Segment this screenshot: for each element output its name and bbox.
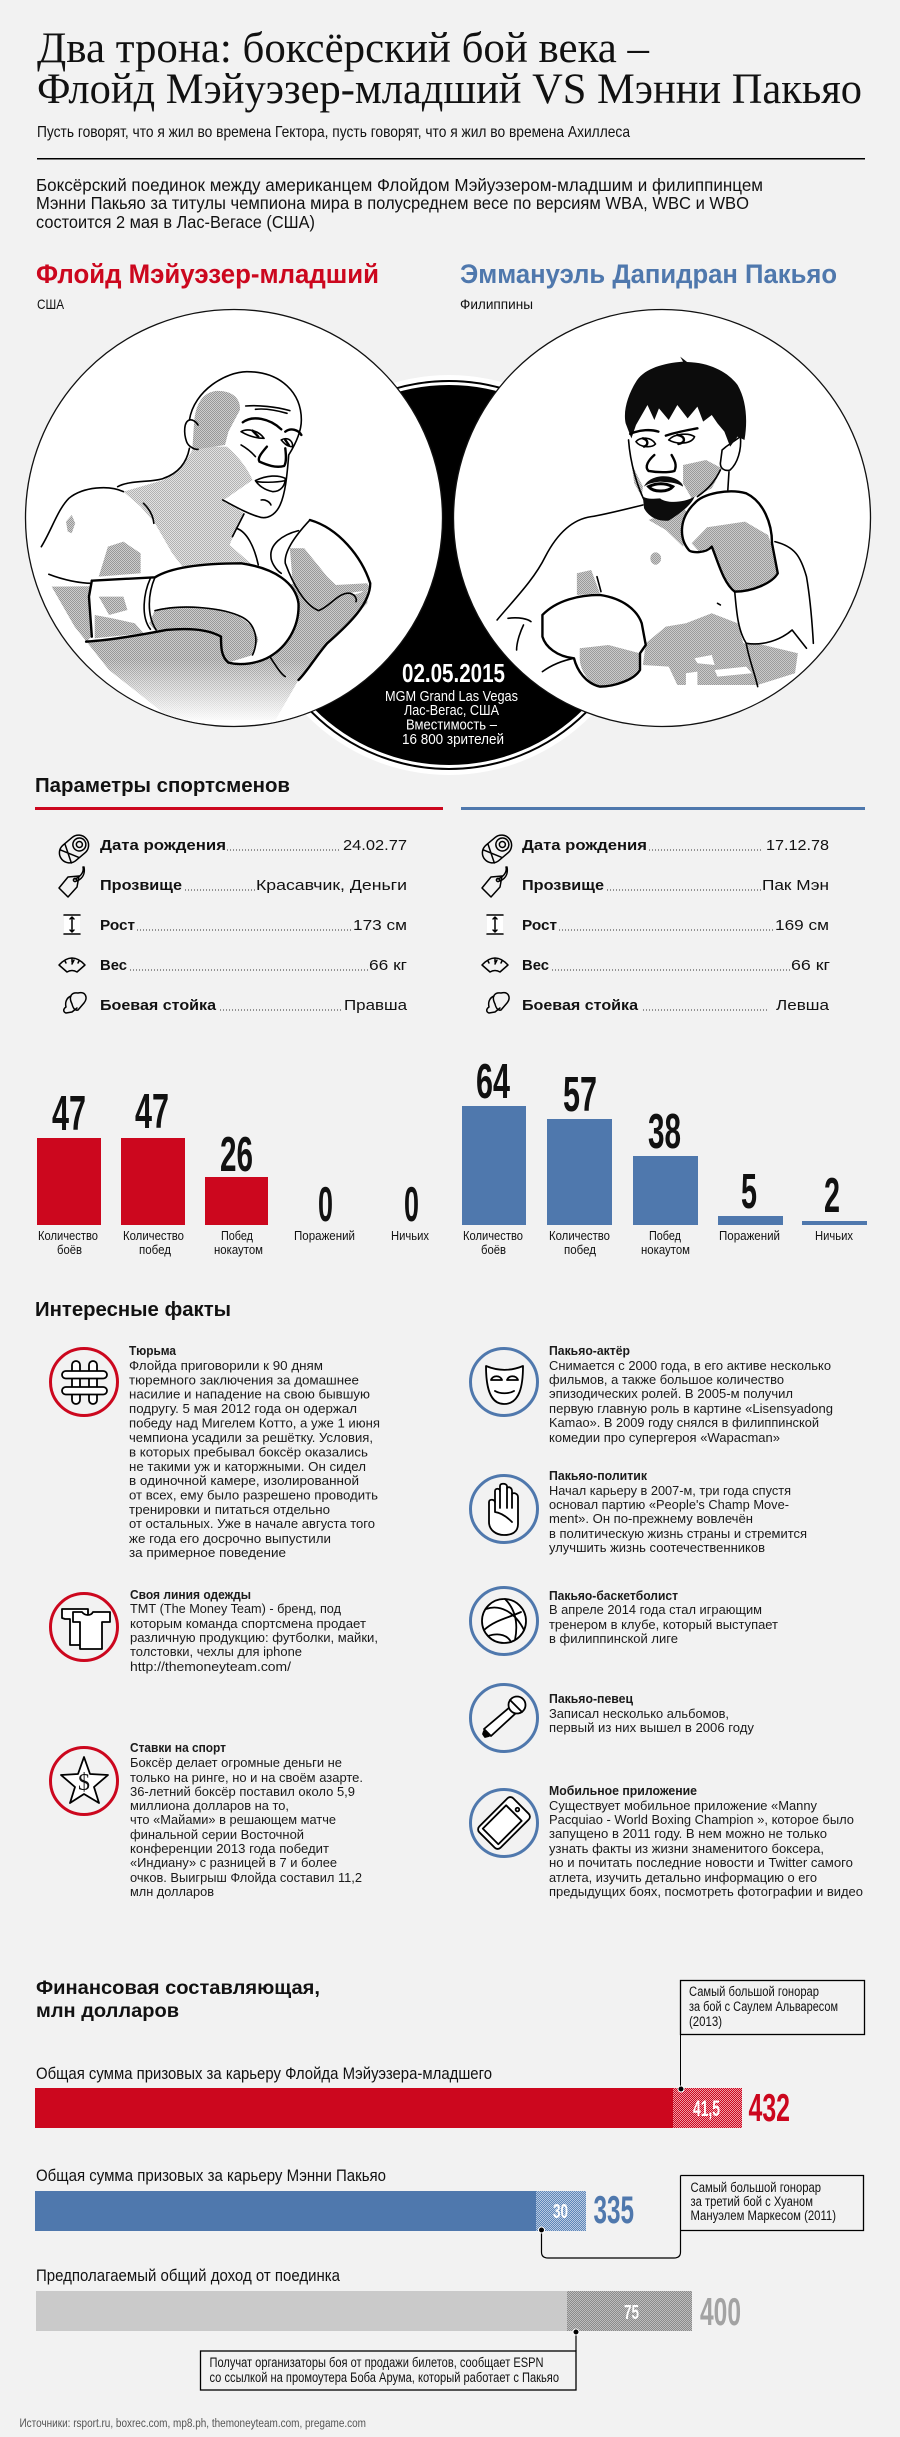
row: stance: Боевая стойка: [100, 997, 217, 1014]
icon: scales: [482, 958, 508, 972]
fact: prison: же года его досрочно выпустили: [129, 1531, 331, 1546]
row: birth date: Дата рождения: [522, 837, 647, 854]
finance bar: Pacquiao: 30: [553, 2201, 568, 2223]
row: stance: Боевая стойка: [522, 997, 639, 1014]
moustache and goatee: [643, 476, 695, 521]
intro text: [36, 175, 763, 232]
icon: scales: [59, 958, 85, 972]
heading: financial part: млн долларов: [36, 2001, 179, 2022]
bar chart: Mayweather record: 47: [135, 1085, 169, 1139]
bar chart: Pacquiao record: Ничьих: [815, 1228, 853, 1243]
icon: microphone: [470, 1684, 538, 1752]
finance bar: fight revenue: 75: [624, 2302, 639, 2324]
fact: clothing line: которым команда спортсмена продает: [130, 1616, 366, 1631]
halftone shading: body: [577, 460, 798, 685]
halftone shading: chest and neck: [123, 447, 253, 568]
bar chart: Pacquiao record: Количество: [549, 1228, 610, 1243]
bar chart: Mayweather record: Количество: [123, 1228, 184, 1243]
bar chart: Mayweather record: 0: [404, 1178, 419, 1232]
icon: tag: [59, 867, 84, 897]
fact: actor: Снимается с 2000 года, в его активе несколько: [549, 1358, 831, 1373]
ink outline: [41, 372, 301, 583]
fighter name: Mayweather: [36, 259, 379, 312]
bar chart: Pacquiao record: Поражений: [719, 1228, 780, 1243]
fact: sports betting: «Индиану» с разницей в 7 и более: [130, 1855, 337, 1870]
fact: sports betting: [50, 1740, 363, 1899]
callout: ticket sales: со ссылкой на промоутера Боба Арума, который работает с Пакьяо: [210, 2370, 559, 2385]
icon: raised hand: [470, 1476, 538, 1542]
upper glove: [683, 514, 692, 541]
callout: biggest Mayweather fee: Самый большой гонорар: [689, 1984, 819, 1999]
heading: financial part: [36, 1978, 320, 2022]
bar chart: Mayweather record: боёв: [57, 1242, 82, 1257]
fact: sports betting: миллиона долларов на то,: [130, 1798, 289, 1813]
icon: dollar star: $: [78, 1770, 90, 1796]
fact: prison: [50, 1343, 380, 1560]
row: stance: Левша: [776, 997, 830, 1014]
subtitle: Пусть говорят, что я жил во времена Гектора, пусть говорят, что я жил во времена Ахиллеса: [37, 124, 630, 141]
row: stance: [100, 997, 408, 1014]
finance bar: Mayweather: 432: [748, 2087, 790, 2130]
bar chart: Mayweather record: побед: [139, 1242, 171, 1257]
ink outline: [497, 437, 813, 687]
fact: sports betting: млн долларов: [130, 1884, 214, 1899]
far glove: [323, 583, 368, 610]
callout: biggest Pacquiao fee: Мануэлем Маркесом (2011): [690, 2208, 836, 2223]
fact: actor: первую главную роль в картине «Lisensyadong: [549, 1401, 833, 1416]
bar chart: Mayweather record: нокаутом: [214, 1242, 263, 1257]
fact: sports betting: Боксёр делает огромные деньги не: [130, 1755, 342, 1770]
fighter name: Pacquiao: [460, 259, 837, 312]
fact: politician: основал партию «People's Champ Move-: [549, 1497, 789, 1512]
fact: sports betting: 36-летний боксёр поставил около 5,9: [130, 1784, 355, 1799]
intro text: состоится 2 мая в Лас-Вегасе (США): [36, 212, 315, 232]
fact: clothing line: толстовки, чехлы для iphone: [130, 1644, 302, 1659]
fact: politician: в политическую жизнь страны и стремится: [549, 1526, 807, 1541]
event details: 02.05.2015: [402, 658, 505, 688]
row: weight: [100, 957, 408, 974]
row: stance: Правша: [344, 997, 408, 1014]
fact: sports betting: конференции 2013 года победит: [130, 1841, 329, 1856]
icon: smartphone: [470, 1790, 538, 1856]
bar chart: Pacquiao record: побед: [564, 1242, 596, 1257]
finance bar: fight revenue: Предполагаемый общий доход от поединка: [36, 2267, 341, 2285]
bar chart: Mayweather record: 0: [318, 1178, 333, 1232]
sources: Источники: rsport.ru, boxrec.com, mp8.ph, themoneyteam.com, pregame.com: [20, 2418, 366, 2430]
bar chart: Pacquiao record: 2: [824, 1169, 840, 1223]
rule: blue: [461, 807, 865, 810]
fact: basketball: тренером в клубе, который выступает: [549, 1617, 778, 1632]
event details: MGM Grand Las Vegas: [385, 689, 518, 705]
fighter name: Pacquiao: Эммануэль Дапидран Пакьяо: [460, 259, 837, 289]
callout: biggest Pacquiao fee: [538, 2176, 864, 2258]
heading: financial part: Финансовая составляющая,: [36, 1978, 320, 1999]
lower glove: [542, 595, 646, 687]
near glove: [86, 563, 299, 664]
row: birth date: 24.02.77: [343, 837, 407, 854]
fact: prison: Тюрьма: [129, 1343, 177, 1358]
fact: basketball: Пакьяо-баскетболист: [549, 1588, 678, 1603]
bar chart: Mayweather record: Поражений: [294, 1228, 355, 1243]
row: birth date: 17.12.78: [766, 837, 829, 854]
fact: prison: подругу. 5 мая 2012 года он одержал: [129, 1401, 357, 1416]
fact: politician: Начал карьеру в 2007-м, три года спустя: [549, 1483, 791, 1498]
fact: actor: эпизодических ролей. В 2005-м получил: [549, 1386, 793, 1401]
finance bar: Mayweather: [35, 2065, 790, 2130]
fact: singer: [470, 1684, 754, 1752]
bar chart: Mayweather record: Количество: [38, 1228, 98, 1243]
title: Два трона: боксёрский бой века –: [37, 25, 649, 72]
header rule: [37, 158, 865, 160]
callout: biggest Mayweather fee: [678, 1980, 864, 2092]
finance bar: Mayweather: Общая сумма призовых за карьеру Флойда Мэйуэзера-младшего: [36, 2065, 492, 2083]
callout: biggest Pacquiao fee: за третий бой с Хуаном: [690, 2194, 813, 2209]
fact: prison: Флойда приговорили к 90 дням: [129, 1358, 323, 1373]
row: weight: 66 кг: [791, 957, 831, 974]
bar chart: Pacquiao record: нокаутом: [641, 1242, 690, 1257]
bar chart: Mayweather record: 26: [220, 1128, 253, 1182]
row: nickname: Прозвище: [522, 877, 604, 894]
central event badge: [249, 375, 649, 775]
row: height: 173 см: [353, 917, 407, 934]
fact: clothing line: [50, 1587, 378, 1674]
fact: actor: Kamao». В 2009 году снялся в филиппинской: [549, 1415, 819, 1430]
icon: gloves: [64, 993, 86, 1013]
fact: sports betting: Ставки на спорт: [130, 1740, 226, 1755]
row: stance: [522, 997, 830, 1014]
callout: ticket sales: Получат организаторы боя от продажи билетов, сообщает ESPN: [210, 2355, 544, 2370]
bar chart: Pacquiao record: боёв: [481, 1242, 506, 1257]
fact: mobile app: предыдущих боях, посмотреть фотографии и видео: [549, 1884, 863, 1899]
title: [37, 25, 862, 113]
row: height: Рост: [522, 917, 557, 934]
callout: biggest Mayweather fee: (2013): [689, 2014, 722, 2029]
bar chart: Pacquiao record: 57: [563, 1068, 597, 1122]
fact: singer: первый из них вышел в 2006 году: [549, 1720, 754, 1735]
finance bar: Mayweather: 41,5: [693, 2096, 720, 2121]
fact: actor: комедии про супергероя «Wapacman»: [549, 1430, 780, 1445]
bar chart: Pacquiao record: Количество: [463, 1228, 523, 1243]
icon: theatre mask: [470, 1348, 538, 1416]
title: Флойд Мэйуэзер-младший VS Мэнни Пакьяо: [37, 66, 862, 113]
icon: baby: [55, 831, 93, 867]
facial features: [630, 428, 697, 472]
bar chart: Pacquiao record: Побед: [649, 1228, 681, 1243]
fact: mobile app: но и почитать последние новости и Twitter самого: [549, 1855, 853, 1870]
fact: basketball: В апреле 2014 года стал играющим: [549, 1602, 762, 1617]
icon: baby: [478, 831, 516, 867]
parameters: Mayweather: [55, 831, 408, 1014]
illustration: Pacquiao: [454, 310, 870, 726]
row: birth date: Дата рождения: [100, 837, 226, 854]
rule: red: [35, 807, 443, 810]
fact: prison: в одиночной камере, изолированной: [129, 1473, 359, 1488]
row: birth date: [522, 837, 829, 854]
fact: prison: тюремного заключения за домашнее: [129, 1372, 359, 1387]
fact: prison: от остальных. Уже в начале августа того: [129, 1516, 375, 1531]
illustration: Mayweather: [26, 310, 442, 726]
fact: clothing line: Своя линия одежды: [130, 1587, 251, 1602]
icon: height: [64, 915, 80, 935]
fact: politician: улучшить жизнь соотечественников: [549, 1540, 765, 1555]
finance bar: Pacquiao: Общая сумма призовых за карьеру Мэнни Пакьяо: [36, 2167, 386, 2185]
fact: clothing line: http://themoneyteam.com/: [130, 1659, 291, 1674]
fact: actor: фильмов, а также большое количество: [549, 1372, 784, 1387]
fact: basketball: в филиппинской лиге: [549, 1631, 678, 1646]
row: height: [100, 917, 407, 934]
fact: politician: Пакьяо-политик: [549, 1468, 647, 1483]
finance bar: fight revenue: [36, 2267, 741, 2334]
fact: prison: чемпиона усадили за решётку. Условия,: [129, 1430, 373, 1445]
event details: Лас-Вегас, США: [404, 703, 499, 719]
callout: ticket sales: [200, 2329, 579, 2390]
fighter name: Pacquiao: Филиппины: [460, 296, 533, 312]
intro text: Боксёрский поединок между американцем Флойдом Мэйуэзером-младшим и филиппинцем: [36, 175, 763, 195]
fact: basketball: [470, 1588, 778, 1654]
bar chart: Pacquiao record: 64: [476, 1055, 510, 1109]
row: height: 169 см: [775, 917, 829, 934]
bar chart: Pacquiao record: 5: [741, 1165, 757, 1219]
highlights on abdomen: [686, 655, 752, 685]
heading: athlete parameters: Параметры спортсменов: [35, 775, 290, 797]
fact: clothing line: различную продукцию: футболки, майки,: [130, 1630, 378, 1645]
row: weight: Вес: [522, 957, 549, 974]
row: birth date: [100, 837, 407, 854]
parameters: Pacquiao: [478, 831, 831, 1014]
finance bar: fight revenue: 400: [700, 2291, 741, 2334]
fact: prison: не такими уж и каторжными. Он сидел: [129, 1459, 366, 1474]
fact: prison: от всех, ему было разрешено проводить: [129, 1487, 378, 1502]
fact: sports betting: только на ринге, но и на своём азарте.: [130, 1770, 363, 1785]
fact: politician: ment». Он по-прежнему вовлечён: [549, 1511, 753, 1526]
fact: actor: [470, 1343, 833, 1445]
fact: sports betting: очков. Выигрыш Флойда составил 11,2: [130, 1870, 362, 1885]
fact: prison: за примерное поведение: [129, 1545, 286, 1560]
row: nickname: Пак Мэн: [762, 877, 829, 894]
fact: singer: Записал несколько альбомов,: [549, 1706, 729, 1721]
event details: [385, 658, 518, 748]
row: nickname: Прозвище: [100, 877, 182, 894]
row: weight: [522, 957, 831, 974]
fact: prison: насилие и нападение на свою бывшую: [129, 1386, 370, 1402]
icon: basketball: [470, 1588, 538, 1654]
event details: Вместимость –: [406, 718, 498, 734]
row: nickname: Красавчик, Деньги: [256, 877, 407, 894]
icon: dollar star: [50, 1748, 118, 1814]
callout: biggest Pacquiao fee: Самый большой гонорар: [690, 2180, 821, 2195]
fact: actor: Пакьяо-актёр: [549, 1343, 630, 1358]
row: weight: Вес: [100, 957, 127, 974]
icon: height: [487, 915, 503, 935]
row: height: [522, 917, 829, 934]
fact: politician: [470, 1468, 807, 1555]
intro text: Мэнни Пакьяо за титулы чемпиона мира в полусреднем весе по версиям WBA, WBC и WBO: [36, 193, 749, 213]
fact: prison: победу над Мигелем Котто, а уже 1 июня: [129, 1415, 380, 1430]
fact: mobile app: Существует мобильное приложение «Manny: [549, 1798, 817, 1813]
row: nickname: [522, 877, 829, 894]
bar chart: Mayweather record: [37, 1085, 429, 1257]
fact: mobile app: [470, 1783, 863, 1899]
heading: interesting facts: Интересные факты: [35, 1299, 231, 1321]
event details: 16 800 зрителей: [402, 732, 504, 748]
fact: sports betting: что «Майами» в решающем матче: [130, 1812, 336, 1827]
bar chart: Pacquiao record: 38: [648, 1105, 681, 1159]
halftone shading: head and patches: [52, 391, 367, 720]
icon: t-shirts: [50, 1594, 118, 1660]
bar chart: Mayweather record: Побед: [221, 1228, 253, 1243]
callout: biggest Mayweather fee: за бой с Саулем Альваресом: [689, 1999, 838, 2014]
fact: mobile app: запущено в 2011 году. В нем можно не только: [549, 1826, 827, 1841]
fact: mobile app: Pacquiao - World Boxing Champion », которое было: [549, 1812, 854, 1827]
fact: prison: в которых пребывал боксёр оказались: [129, 1445, 368, 1460]
bar chart: Mayweather record: Ничьих: [391, 1228, 429, 1243]
bar chart: Pacquiao record: [462, 1055, 867, 1257]
fighter name: Mayweather: США: [37, 296, 65, 312]
fact: mobile app: узнать факты из жизни знаменитого боксера,: [549, 1841, 824, 1856]
icon: gloves: [487, 993, 509, 1013]
fact: mobile app: атлета, изучить детально информацию о его: [549, 1870, 817, 1885]
row: nickname: [100, 877, 407, 894]
row: height: Рост: [100, 917, 135, 934]
fact: sports betting: финальной серии Восточной: [130, 1827, 304, 1842]
icon: prison bars: [50, 1348, 118, 1416]
row: weight: 66 кг: [369, 957, 408, 974]
finance bar: Pacquiao: [35, 2167, 634, 2232]
fact: prison: тренировки и питаться отдельно: [129, 1502, 330, 1517]
fact: singer: Пакьяо-певец: [549, 1691, 633, 1706]
fact: clothing line: ТМТ (The Money Team) - бренд, под: [130, 1601, 341, 1616]
icon: tag: [482, 867, 507, 897]
bar chart: Mayweather record: 47: [52, 1087, 86, 1141]
finance bar: Pacquiao: 335: [594, 2189, 634, 2232]
fighter name: Mayweather: Флойд Мэйуэзер-младший: [36, 259, 379, 289]
hair: [625, 357, 746, 447]
fact: mobile app: Мобильное приложение: [549, 1783, 697, 1798]
fade at base: [87, 665, 356, 724]
